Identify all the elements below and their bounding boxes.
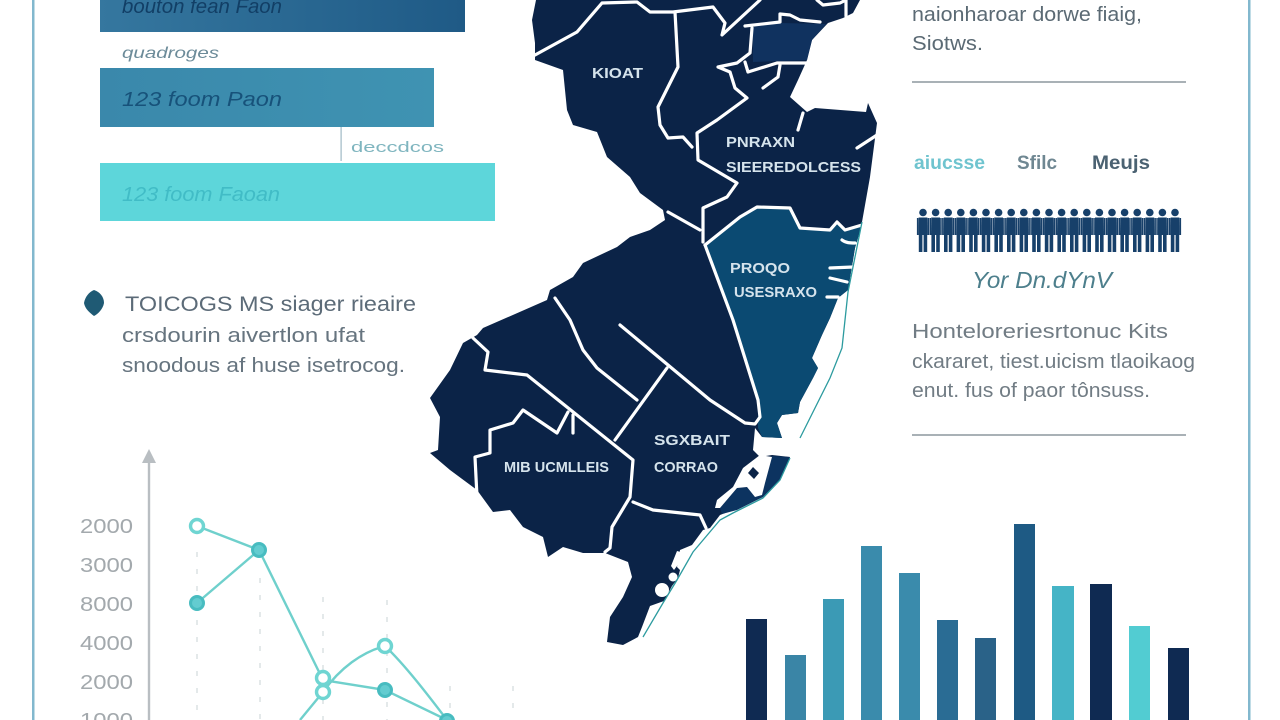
series lines [197,526,447,720]
map: south-east island gap [715,455,772,508]
map: county labels: MIB UCMLLEIS [504,459,609,476]
text block: right paragraph: ckararet, tiest.uicism tlaoikaog [912,351,1195,373]
bar 1 [100,0,465,32]
text block: top right note: Siotws. [912,33,983,55]
icon: bullet marker [84,290,104,316]
bar 3: 123 foom Faoan [122,184,280,206]
map: county labels: SGXBAIT [654,432,730,449]
map: county labels [504,65,861,476]
text block: top right note [912,4,1186,83]
map: highlighted county [705,207,862,438]
line chart [80,449,513,720]
map: county labels: KIOAT [592,65,643,82]
map: south-east island tint [720,456,790,514]
text block: right paragraph: enut. fus of paor tônsuss. [912,380,1150,402]
axis labels: 2000 [80,516,133,538]
legend [914,153,1150,174]
gridlines [197,552,513,720]
bar chart [746,524,1189,720]
map [430,0,877,645]
axis arrow [142,449,156,720]
text block: left note: TOICOGS MS siager rieaire [125,293,416,316]
map: county labels: SIEEREDOLCESS [726,159,861,176]
text block: left note: crsdourin aivertlon ufat [122,325,366,347]
text block: right paragraph [912,321,1195,436]
bar 1 caption: quadroges [122,45,219,62]
text block: right paragraph: Honteloreriesrtonuc Kits [912,321,1168,343]
panel: horizontal stat bars [100,0,495,221]
axis labels: 3000 [80,555,133,577]
bar 2 caption [340,127,444,161]
axis labels: 8000 [80,594,133,616]
map: barrier coast line [643,222,862,637]
legend: aiucsse [914,153,985,174]
icon row: people pictogram [917,209,1181,252]
pictogram caption: Yor Dn.dYnV [972,267,1115,293]
text block: top right note: naionharoar dorwe fiaig, [912,4,1142,26]
bar 2 caption: deccdcos [351,139,444,156]
legend: Meujs [1092,153,1150,174]
axis labels [80,516,133,720]
bar 2: 123 foom Paon [122,89,282,111]
map: county labels: CORRAO [654,459,718,476]
bar 3 [100,163,495,221]
legend: Sfilc [1017,153,1057,174]
axis labels: 2000 [80,672,133,694]
map: lighter northern county [753,23,826,62]
map: landmass [430,0,877,645]
map: cape inlets [655,551,684,597]
series markers [190,520,454,720]
map: county labels: PNRAXN [726,134,795,151]
map: county labels: PROQO [730,260,790,277]
map: county borders [473,0,877,552]
map: county labels: USESRAXO [734,284,817,301]
text block: left note: snoodous af huse isetrocog. [122,355,405,377]
bar 2 [100,68,434,127]
text block: left note [84,290,416,377]
map: lagoon spot [748,467,759,479]
axis labels: 4000 [80,633,133,655]
